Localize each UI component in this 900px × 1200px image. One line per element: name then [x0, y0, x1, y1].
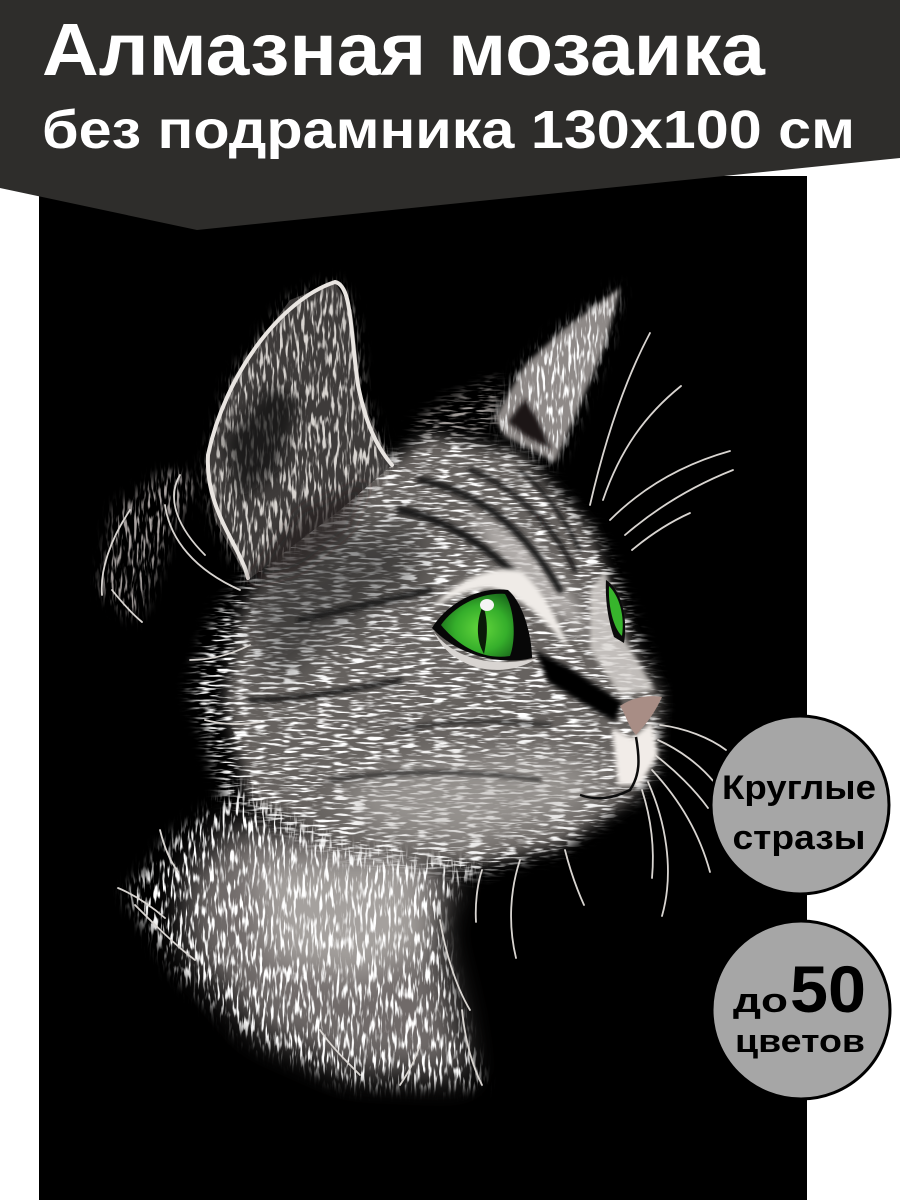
cheek highlight: [330, 750, 610, 845]
title: Алмазная мозаика: [42, 8, 766, 91]
photo panel: black background: [39, 176, 807, 1200]
banner shape: [0, 0, 900, 230]
subtitle: без подрамника 130х100 см: [42, 100, 855, 160]
right ear shadow: [508, 398, 552, 450]
left ear interior: [205, 282, 392, 580]
badge text line two: стразы: [732, 819, 866, 857]
shadow under ear: [245, 480, 370, 585]
badge circle: [711, 716, 889, 894]
left eye: [432, 589, 538, 670]
badge: round rhinestones: [711, 716, 889, 894]
right ear: [495, 288, 620, 462]
fur behind right ear: [410, 378, 500, 440]
eye lower lid: [434, 632, 538, 670]
cat back shadow fur: [100, 470, 200, 620]
left ear fur texture: [205, 282, 392, 580]
white muzzle: [612, 722, 658, 785]
right ear fur texture: [495, 288, 620, 462]
eye outline: [432, 589, 532, 660]
illustration: cat portrait: [100, 282, 733, 1085]
right green iris: [609, 586, 623, 636]
cat head base: [225, 435, 660, 865]
green iris: [441, 594, 514, 657]
badge text line one: Круглые: [722, 769, 876, 807]
cat neck and chest base: [185, 830, 465, 1075]
badge number 50: 50: [790, 952, 866, 1026]
badge word colours: цветов: [735, 1023, 865, 1059]
badge circle: [712, 921, 890, 1099]
cat neck bright patch: [250, 860, 430, 980]
nose: [620, 696, 662, 735]
cat neck fur texture: [125, 780, 482, 1085]
left ear rim: [208, 282, 392, 578]
whiskers and stray hairs: [102, 333, 733, 1085]
header banner: [0, 0, 900, 230]
forehead highlight: [470, 510, 590, 640]
eye highlight: [480, 599, 494, 611]
right eye: [606, 580, 625, 643]
eye rim: [606, 580, 625, 643]
mouth line: [580, 737, 638, 798]
pupil: [478, 605, 487, 654]
dark face profile shadow around nose: [535, 650, 622, 722]
white nose bridge: [590, 570, 655, 695]
white brow above eye: [430, 569, 570, 650]
dark patch at rear of head: [240, 520, 420, 690]
badge: up to 50 colours: [712, 921, 890, 1099]
left ear dark hollow: [225, 385, 300, 500]
forehead stripes: [250, 470, 580, 780]
badge word up to: до: [733, 982, 788, 1020]
cat head fur texture: [190, 430, 660, 875]
